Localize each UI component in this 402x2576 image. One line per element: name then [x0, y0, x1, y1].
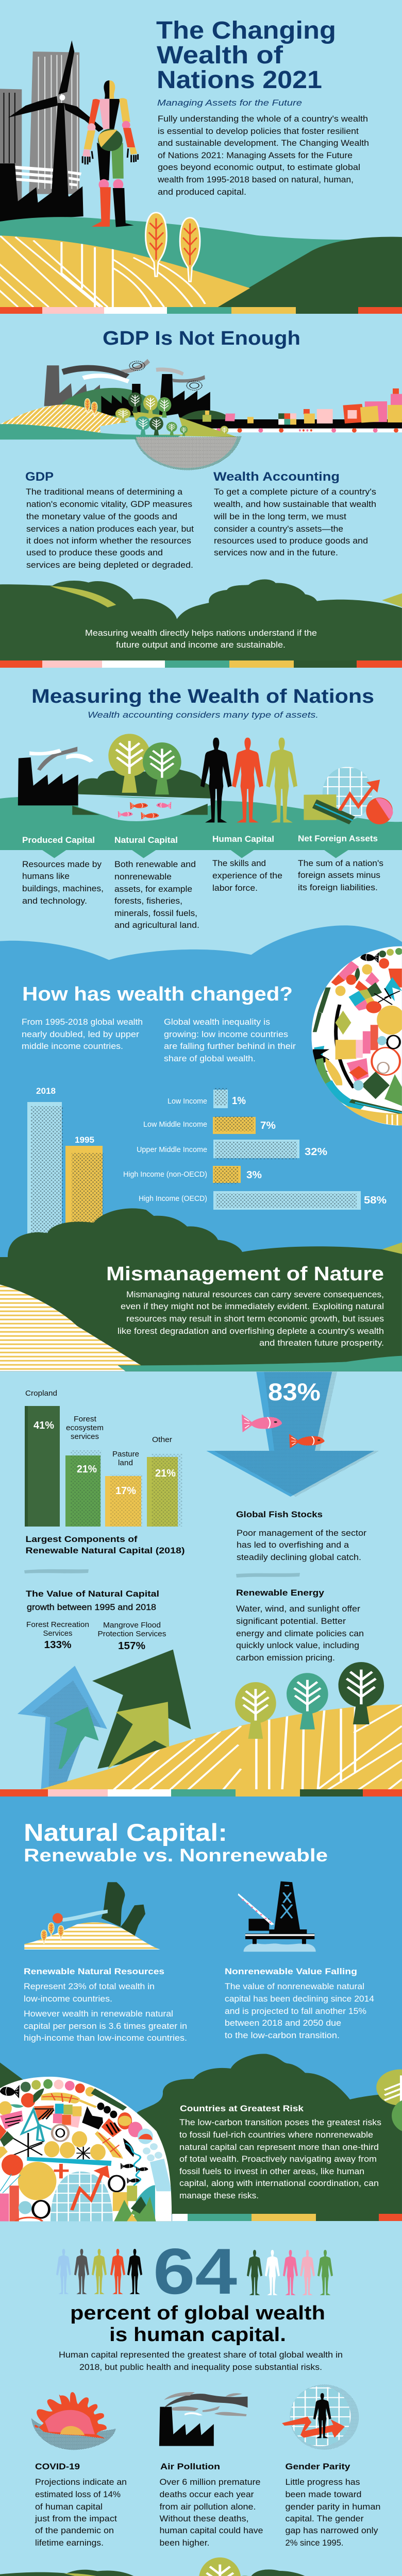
text block: countries at greatest risk: The low-carbon transition poses the greatest risks: [179, 2118, 381, 2127]
panel: natural capital blue background: [0, 1797, 402, 2221]
bar chart: global wealth 2018 vs 1995: 2018: [36, 1086, 56, 1096]
text block: inequality: share of global wealth.: [164, 1054, 256, 1063]
asset: natural capital: Natural Capital: [114, 835, 178, 845]
green hill behind factories: [61, 388, 169, 417]
illustration: mosaic dome: [0, 2076, 172, 2222]
text block: value of natural capital: growth between 1995 and 2018: [27, 1603, 156, 1612]
olive hill: [132, 411, 237, 437]
bar: low middle income: Low Middle Income: [143, 1121, 207, 1129]
bar: high income non-OECD: High Income (non-OECD): [123, 1171, 207, 1179]
halftone bowl: [135, 436, 242, 470]
text block: countries at greatest risk: of total wealth. Proactively navigating away from: [179, 2155, 377, 2164]
text block: intro: [157, 114, 369, 197]
text block: GDP: the monetary value of the goods and: [26, 512, 177, 521]
text block: GDP: services are being depleted or degraded.: [26, 561, 193, 570]
bar: other: 21%: [155, 1468, 176, 1479]
bar: high income OECD: 58%: [364, 1195, 387, 1206]
text block: air pollution: deaths occur each year: [160, 2490, 254, 2499]
text block: covid: estimated loss of 14%: [35, 2490, 121, 2499]
asset: natural capital: and agricultural land.: [114, 921, 199, 930]
asset: human capital: experience of the: [212, 871, 282, 880]
text block: mismanagement: resources may result in short term economic growth, but issues: [126, 1314, 384, 1324]
text block: nonrenewable value falling: capital has been declining since 2014: [225, 1994, 374, 2004]
text block: nonrenewable value falling: Nonrenewable Value Falling: [225, 1967, 357, 1976]
text block: covid: [35, 2462, 127, 2548]
title: Wealth of: [157, 42, 283, 69]
heading: Measuring the Wealth of Nations: Measuring the Wealth of Nations: [31, 686, 374, 707]
trees: [85, 393, 228, 437]
icon: oil rig: [238, 1882, 316, 1952]
text block: intro: of Nations 2021: Managing Assets for the Future: [158, 151, 353, 160]
asset: human capital: labor force.: [212, 884, 258, 893]
text block: wealth doubled: middle income countries.: [22, 1042, 123, 1051]
text block: renewable energy: Renewable Energy: [236, 1588, 325, 1598]
text block: renewable energy: energy and climate policies can: [236, 1629, 364, 1638]
text block: largest components: Largest Components of: [26, 1534, 138, 1544]
bar: other: Other: [152, 1436, 172, 1444]
asset: produced capital: Produced Capital: [22, 835, 95, 845]
bar: high income OECD: [139, 1191, 387, 1210]
text block: value of natural capital: The Value of Natural Capital: [26, 1589, 159, 1599]
text block: countries at greatest risk: to fossil fuel-rich countries where nonrenewable: [179, 2130, 373, 2140]
asset: human capital: The skills and: [212, 859, 266, 868]
text block: Wealth Accounting: To get a complete picture of a country's: [214, 487, 376, 497]
text block: nonrenewable value falling: to the low-carbon transition.: [225, 2031, 340, 2040]
text block: countries at greatest risk: capital, along with international coordination, can: [179, 2179, 379, 2188]
text block: gender parity: 2% since 1995.: [286, 2538, 343, 2548]
bar: pasture land: 17%: [115, 1485, 136, 1497]
heading: Mismanagement of Nature: Mismanagement of Nature: [106, 1263, 384, 1285]
text block: human capital: 2018, but public health and inequality pose substantial risks.: [79, 2363, 322, 2372]
bar: forest ecosystem services: Forest: [74, 1415, 96, 1423]
stat: 83 percent: 83%: [268, 1378, 321, 1405]
icon: city buildings: [0, 52, 83, 222]
panel: green hills: [0, 580, 402, 660]
text block: Wealth Accounting: will be in the long term, we must: [213, 512, 346, 521]
text block: Wealth Accounting: wealth, and how sustainable that wealth: [213, 500, 376, 509]
headline: percent of global wealth: percent of global wealth: [70, 2302, 325, 2324]
striped field: [40, 1704, 402, 1789]
text block: renewable natural resources: Represent 23% of total wealth in: [24, 1982, 155, 1991]
text block: renewable natural resources: low-income countries.: [24, 1994, 112, 2004]
text block: covid: lifetime earnings.: [35, 2538, 104, 2548]
text block: countries at greatest risk: [179, 2104, 381, 2200]
subtitle: Managing Assets for the Future: [157, 98, 302, 108]
asset: natural capital: [114, 835, 199, 930]
panel: four asset types illustration: [0, 734, 402, 858]
asset: natural capital: forests, fisheries,: [114, 896, 182, 906]
striped wheat field: [0, 233, 256, 308]
asset: human capital: [212, 834, 282, 893]
text block: wealth doubled: [22, 1018, 143, 1051]
text block: covid: Projections indicate an: [35, 2478, 127, 2487]
illustration: GDP landscape and city: [0, 359, 402, 470]
text block: countries at greatest risk: natural capital can represent more than one-third: [179, 2143, 379, 2152]
dark green hill: [216, 237, 402, 307]
text block: wealth doubled: From 1995-2018 global wealth: [22, 1018, 143, 1027]
human figure: [82, 80, 138, 227]
text block: gender parity: gap has narrowed only: [286, 2526, 378, 2535]
bar: forest ecosystem services: ecosystem: [66, 1424, 104, 1432]
text block: mismanagement: [118, 1290, 384, 1348]
illustration: growth arrows, field and trees: [0, 1650, 402, 1793]
text block: Wealth Accounting: consider a country's assets—the: [214, 524, 343, 534]
text block: air pollution: human capital could have: [160, 2526, 263, 2535]
icon: wheat: [146, 213, 200, 281]
bar: pasture land: land: [118, 1459, 133, 1467]
text block: Wealth Accounting: resources used to produce goods and: [214, 536, 368, 546]
text block: covid: just from the impact: [35, 2514, 117, 2523]
black city band: [184, 419, 402, 433]
asset: produced capital: and technology.: [22, 896, 87, 906]
asset: net foreign assets: foreign assets minus: [298, 871, 380, 880]
text block: GDP: [25, 470, 194, 570]
bar: pasture land: Pasture: [112, 1450, 139, 1459]
heading: Natural Capital: [24, 1819, 328, 1866]
title: The Changing: [156, 17, 336, 44]
text block: gender parity: been made toward: [286, 2490, 362, 2499]
text block: human capital: [59, 2350, 343, 2372]
bar: other: [147, 1436, 182, 1527]
caption: measuring wealth: Measuring wealth directly helps nations understand if the: [85, 629, 317, 638]
asset: produced capital: buildings, machines,: [22, 884, 104, 893]
bar: high income non-OECD: 3%: [246, 1170, 262, 1181]
icon: net foreign assets: [304, 767, 393, 824]
bar: low income: [167, 1088, 246, 1108]
asset: natural capital: Both renewable and: [114, 860, 196, 869]
text block: covid: of the pandemic on: [35, 2526, 114, 2535]
bar: forest ecosystem services: 21%: [77, 1464, 97, 1475]
bar: cropland: [25, 1389, 60, 1527]
icon: renewable landscape: [24, 1882, 160, 1950]
asset: natural capital: nonrenewable: [114, 872, 172, 882]
text block: air pollution: [160, 2462, 263, 2548]
text block: air pollution: from air pollution alone.: [160, 2502, 256, 2512]
text block: covid: of human capital: [35, 2502, 103, 2512]
teal ground with pointers: [0, 796, 402, 858]
bar: cropland: 41%: [34, 1420, 54, 1431]
text block: renewable energy: significant potential. Better: [236, 1617, 346, 1626]
text block: Wealth Accounting: services now and in the future.: [214, 548, 338, 557]
text block: renewable natural resources: However wealth in renewable natural: [24, 2009, 173, 2019]
asset: natural capital: assets, for example: [114, 885, 192, 894]
icon: polluting factory: [159, 2392, 247, 2446]
text block: renewable energy: quickly unlock value, including: [236, 1641, 359, 1650]
text block: mismanagement: Mismanaging natural resources can carry severe consequences,: [126, 1290, 384, 1299]
bar: pasture land: [105, 1450, 142, 1527]
bar: forest ecosystem services: services: [71, 1433, 99, 1441]
subheading: Wealth accounting considers many type of assets.: [88, 710, 319, 720]
text block: intro: Fully understanding the whole of a country's wealth: [158, 114, 368, 124]
bar: low income: 1%: [232, 1095, 246, 1107]
panel: yellow hill and teal band: [0, 1284, 402, 1371]
bar: high income non-OECD: [123, 1166, 262, 1184]
text block: nonrenewable value falling: between 2018 and 2050 due: [225, 2019, 341, 2028]
text block: nonrenewable value falling: and is projected to fall another 15%: [225, 2007, 366, 2016]
text block: GDP: services a nation produces each year, but: [26, 524, 194, 534]
text block: GDP: nation's economic vitality, GDP measures: [26, 500, 192, 509]
text block: mismanagement: like forest degradation and overfishing deplete a country's wealth: [118, 1327, 384, 1336]
text block: air pollution: Air Pollution: [160, 2462, 220, 2471]
city blocks: [203, 388, 402, 425]
yellow field hill: [0, 404, 136, 433]
text block: value of natural capital: [26, 1589, 166, 1652]
heading: Natural Capital: Natural Capital:: [24, 1819, 227, 1846]
panel: mismanagement hills: [0, 1208, 402, 1371]
text block: countries at greatest risk: manage these risks.: [179, 2191, 259, 2200]
text block: gender parity: gender parity in human: [286, 2502, 380, 2512]
icon: growth arrows: [18, 1650, 191, 1789]
text block: intro: goes beyond economic output, to estimate global: [158, 163, 360, 172]
illustration: mosaic globe: [308, 944, 402, 1127]
heading: GDP Is Not Enough: GDP Is Not Enough: [103, 328, 300, 349]
text block: gender parity: Gender Parity: [286, 2462, 350, 2471]
text block: mismanagement: and threaten future prosperity.: [259, 1338, 384, 1348]
icon: 83 percent down arrow with fish: [206, 1372, 379, 1497]
text block: Wealth Accounting: [213, 470, 376, 557]
stat: 64: 64: [153, 2235, 237, 2308]
text block: global fish stocks: steadily declining global catch.: [237, 1553, 361, 1562]
text block: global fish stocks: Poor management of the sector: [237, 1529, 367, 1538]
bar: upper middle income: [137, 1140, 327, 1159]
caption: measuring wealth: future output and income are sustainable.: [116, 640, 286, 650]
text block: global fish stocks: [236, 1510, 367, 1562]
text block: intro: wealth from 1995-2018 based on natural, human,: [157, 175, 354, 184]
colour bar 3: [0, 1789, 402, 1797]
bar: high income OECD: High Income (OECD): [139, 1195, 207, 1203]
text block: GDP: GDP: [25, 470, 54, 484]
icon: produced capital factory: [18, 747, 94, 805]
text block: GDP: The traditional means of determining a: [26, 487, 183, 497]
panel: blue wave background: [0, 925, 402, 1273]
bar chart: global wealth 2018 vs 1995: [27, 1086, 104, 1244]
bar chart: global wealth 2018 vs 1995: 1995: [75, 1135, 94, 1145]
bar: forest ecosystem services: [65, 1415, 104, 1527]
text block: value of natural capital: Protection Services: [98, 1630, 166, 1638]
bar: low middle income: 7%: [260, 1120, 276, 1131]
river: [100, 414, 185, 435]
text block: air pollution: Over 6 million premature: [160, 2478, 261, 2487]
text block: inequality: Global wealth inequality is: [164, 1018, 270, 1027]
row of people figures: [56, 2249, 333, 2295]
icon: virus: [31, 2392, 116, 2450]
text block: global fish stocks: Global Fish Stocks: [236, 1510, 323, 1519]
asset: produced capital: humans like: [22, 872, 70, 881]
text block: inequality: [164, 1018, 296, 1063]
text block: renewable energy: carbon emission pricing.: [236, 1653, 335, 1663]
text block: value of natural capital: 157%: [118, 1640, 145, 1652]
text block: GDP: it does not inform whether the resources: [26, 536, 191, 546]
icon: trees: [235, 1662, 384, 1739]
text block: human capital: Human capital represented the greatest share of total global wealth in: [59, 2350, 343, 2360]
text block: value of natural capital: 133%: [44, 1639, 72, 1651]
icon: gender parity: [282, 2384, 359, 2450]
text block: covid: COVID-19: [35, 2462, 80, 2471]
text block: GDP: used to produce these goods and: [26, 548, 163, 557]
icon: natural capital trees and river: [72, 734, 215, 821]
divider smudges: [24, 1569, 300, 1578]
text block: intro: and produced capital.: [158, 188, 246, 197]
text block: global fish stocks: has led to overfishing and a: [237, 1540, 349, 1550]
colour bar 2: [0, 660, 402, 668]
text block: renewable natural resources: high-income than low-income countries.: [24, 2033, 187, 2043]
text block: intro: and sustainable development. The Changing Wealth: [158, 139, 369, 148]
asset: produced capital: [22, 835, 104, 906]
text block: renewable energy: Water, wind, and sunlight offer: [236, 1604, 361, 1614]
icon: human capital figures: [200, 738, 297, 823]
teal ground: [0, 424, 181, 439]
caption: measuring wealth: [85, 629, 317, 650]
text block: inequality: are falling further behind in their: [164, 1042, 296, 1051]
icon: black factories: [101, 374, 210, 419]
text block: largest components: [26, 1534, 185, 1555]
text block: renewable natural resources: Renewable Natural Resources: [24, 1967, 164, 1976]
panel: countries at risk hills: [0, 2054, 402, 2222]
text block: nonrenewable value falling: [225, 1967, 374, 2040]
text block: Wealth Accounting: Wealth Accounting: [213, 470, 340, 484]
bar: cropland: Cropland: [25, 1389, 57, 1398]
asset: natural capital: minerals, fossil fuels,: [114, 909, 197, 918]
bar: upper middle income: 32%: [305, 1146, 327, 1158]
panel: hills with trees: [0, 2557, 402, 2576]
text block: mismanagement: even if they might not be immediately evident. Exploiting natural: [121, 1302, 384, 1311]
heading: Natural Capital: Renewable vs. Nonrenewable: [24, 1845, 328, 1866]
text block: countries at greatest risk: fossil fuels to invest in other areas, like human: [179, 2167, 364, 2176]
text block: renewable natural resources: capital per person is 3.6 times greater in: [24, 2022, 187, 2031]
title: [156, 17, 336, 94]
text block: value of natural capital: Mangrove Flood: [103, 1621, 161, 1630]
title: Nations 2021: [157, 66, 322, 94]
text block: air pollution: been higher.: [160, 2538, 209, 2548]
text block: renewable natural resources: [24, 1967, 187, 2043]
text block: value of natural capital: Forest Recreation: [26, 1621, 89, 1629]
asset: net foreign assets: The sum of a nation's: [298, 859, 383, 868]
text block: wealth doubled: nearly doubled, led by upper: [22, 1030, 140, 1039]
text block: countries at greatest risk: Countries at Greatest Risk: [180, 2104, 304, 2113]
asset: human capital: Human Capital: [212, 834, 274, 844]
bar chart: share of wealth by income group: [123, 1088, 387, 1210]
text block: gender parity: Little progress has: [286, 2478, 360, 2487]
colour bar 4: [172, 2214, 402, 2221]
text block: gender parity: capital. The gender: [286, 2514, 364, 2523]
headline: percent of global wealth: is human capital.: [109, 2324, 286, 2346]
asset: produced capital: Resources made by: [22, 860, 102, 869]
dark hill: [178, 410, 226, 420]
text block: value of natural capital: Services: [43, 1630, 72, 1638]
bar chart: renewable natural capital: [25, 1389, 182, 1527]
colour bar 1: [0, 307, 402, 314]
icon: grey factory and smoke: [44, 359, 205, 406]
hills behind field: [0, 217, 402, 307]
text block: intro: is essential to develop policies that foster resilient: [158, 127, 359, 136]
asset: net foreign assets: Net Foreign Assets: [298, 834, 378, 843]
panel: hero illustration: [0, 40, 402, 308]
bar: upper middle income: Upper Middle Income: [137, 1146, 207, 1154]
text block: inequality: growing: low income countries: [164, 1030, 288, 1039]
text block: air pollution: Without these deaths,: [160, 2514, 248, 2523]
text block: nonrenewable value falling: The value of nonrenewable natural: [225, 1982, 364, 1991]
text block: largest components: Renewable Natural Capital (2018): [26, 1546, 185, 1555]
bar: low middle income: [143, 1116, 276, 1134]
icon: wind turbine: [8, 40, 104, 216]
asset: net foreign assets: its foreign liabilities.: [298, 883, 378, 892]
text block: renewable energy: [236, 1588, 364, 1663]
bar: low income: Low Income: [167, 1097, 207, 1106]
asset labels and descriptions: [22, 834, 383, 930]
text block: gender parity: [286, 2462, 380, 2548]
heading: How has wealth changed: How has wealth changed?: [22, 984, 293, 1005]
asset: net foreign assets: [298, 834, 383, 892]
headline: percent of global wealth: [70, 2302, 325, 2346]
